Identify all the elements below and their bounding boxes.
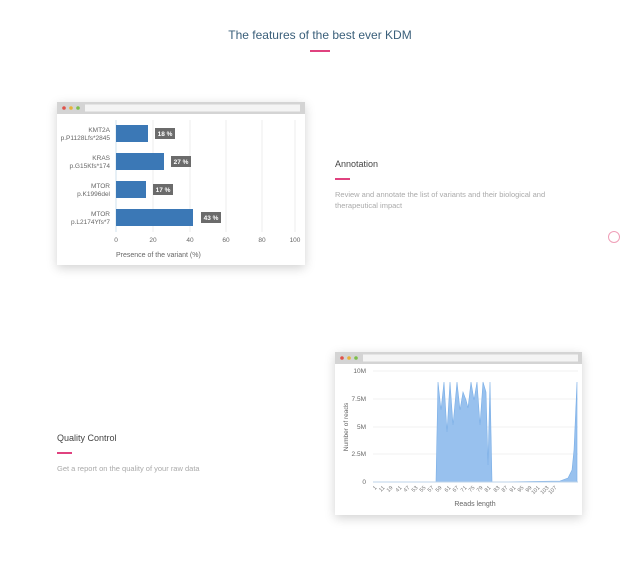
text block: quality control [57, 433, 200, 473]
panel: reads length chart card [335, 352, 582, 515]
panel: reads length chart card: 10M [353, 368, 366, 375]
panel: variant bar chart card: 0 [114, 237, 118, 244]
panel: reads length chart card: 83 [493, 485, 501, 494]
panel: reads length chart card: 95 [517, 485, 525, 494]
panel: reads length chart card: 7.5M [352, 396, 366, 403]
text block: annotation: Annotation [335, 159, 378, 169]
panel: variant bar chart card: p.G15Kfs*174 [70, 163, 110, 170]
panel: variant bar chart card: 18 % [158, 131, 173, 138]
panel: reads length chart card: 59 [435, 485, 443, 494]
panel: variant bar chart card: 17 % [156, 187, 171, 194]
panel: reads length chart card: 19 [386, 485, 394, 494]
panel: reads length chart card: 47 [403, 485, 411, 494]
panel: reads length chart card: 91 [509, 485, 517, 494]
panel: variant bar chart card: 27 % [174, 159, 189, 166]
panel: reads length chart card: 5M [357, 424, 366, 431]
panel: reads length chart card: 75 [468, 485, 476, 494]
panel: reads length chart card: 0 [362, 479, 366, 486]
panel: reads length chart card: 71 [460, 485, 468, 494]
panel: variant bar chart card [57, 102, 305, 265]
panel: variant bar chart card: Presence of the variant (%) [116, 252, 201, 259]
panel: reads length chart card: 61 [444, 485, 452, 494]
title: The features of the best ever KDM [228, 28, 412, 42]
text block: quality control: Quality Control [57, 433, 117, 443]
panel: reads length chart card: 99 [525, 485, 533, 494]
panel: reads length chart card: 57 [427, 485, 435, 494]
panel: reads length chart card: 53 [411, 485, 419, 494]
panel: variant bar chart card: KMT2A [88, 127, 111, 134]
panel: variant bar chart card: MTOR [91, 183, 110, 190]
panel: variant bar chart card: 100 [290, 237, 301, 244]
panel: reads length chart card: 11 [378, 485, 386, 493]
panel: variant bar chart card: p.L2174Yfs*7 [71, 219, 110, 226]
panel: reads length chart card: 87 [501, 485, 509, 494]
panel: variant bar chart card: p.K1996del [77, 191, 111, 198]
panel: reads length chart card: 107 [548, 485, 558, 496]
bar chart bars [116, 125, 193, 226]
panel: variant bar chart card: 60 [222, 237, 230, 244]
panel: reads length chart card: 103 [540, 485, 550, 496]
text: Get a report on the quality of your raw data [57, 464, 200, 473]
text: Review and annotate the list of variants and their biological and therapeutical impact [335, 190, 545, 210]
panel: reads length chart card: Reads length [454, 501, 496, 508]
panel: variant bar chart card: p.P1128Lfs*2845 [61, 135, 110, 142]
panel: reads length chart card: 79 [476, 485, 484, 494]
panel: variant bar chart card: MTOR [91, 211, 110, 218]
panel: reads length chart card: 67 [452, 485, 460, 494]
panel: reads length chart card: 101 [531, 485, 541, 496]
panel: reads length chart card: 1 [372, 485, 378, 492]
panel: variant bar chart card: KRAS [92, 155, 111, 162]
panel: variant bar chart card: 80 [258, 237, 266, 244]
panel: variant bar chart card: 43 % [204, 215, 219, 222]
panel: reads length chart card: 41 [395, 485, 403, 494]
area chart [373, 382, 577, 482]
panel: reads length chart card: 2.5M [352, 451, 366, 458]
icon: pink circle [608, 231, 620, 243]
panel: reads length chart card: Number of reads [343, 402, 350, 451]
panel: variant bar chart card: 20 [149, 237, 157, 244]
panel: reads length chart card: 55 [419, 485, 427, 494]
text block: annotation [335, 159, 545, 210]
panel: variant bar chart card: 40 [186, 237, 194, 244]
panel: reads length chart card: 81 [484, 485, 492, 494]
